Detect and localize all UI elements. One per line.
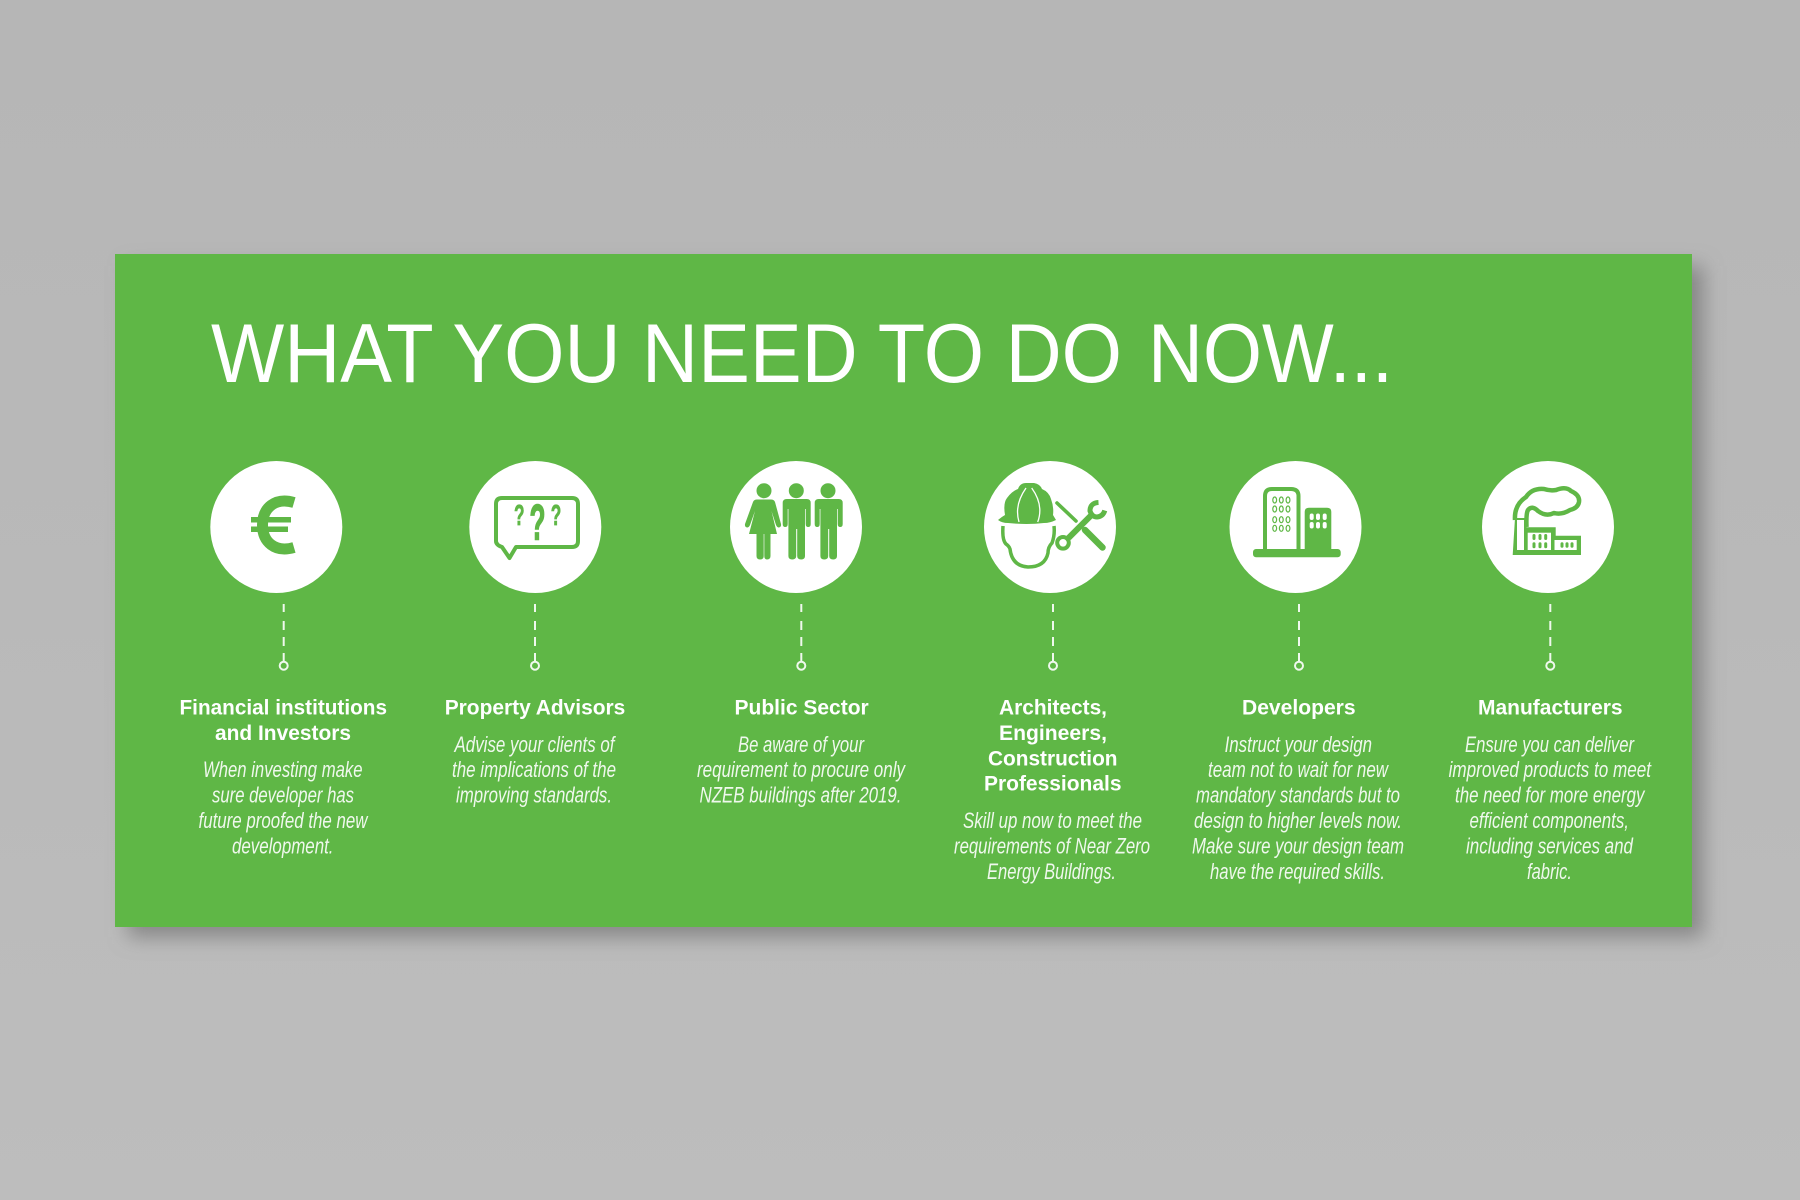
column: developers <box>1192 461 1404 884</box>
description: improved products to meet <box>1449 757 1652 782</box>
description: including services and <box>1466 834 1634 858</box>
connector <box>531 604 539 670</box>
description: future proofed the new <box>198 808 369 833</box>
description: Skill up now to meet the <box>963 808 1142 833</box>
icon: euro <box>210 461 342 593</box>
description: sure developer has <box>212 782 354 808</box>
description <box>954 808 1150 884</box>
description: Instruct your design <box>1225 732 1372 757</box>
description: requirements of Near Zero <box>954 834 1150 858</box>
heading <box>984 696 1122 796</box>
heading: Developers <box>1242 696 1356 720</box>
description: design to higher levels now. <box>1194 808 1402 833</box>
icon: speech bubble with question marks: ? <box>530 494 546 550</box>
description: improving standards. <box>456 782 612 808</box>
heading: Financial institutions <box>180 696 387 720</box>
description: requirement to procure only <box>697 757 907 782</box>
icon: factory <box>1482 461 1614 593</box>
heading: Construction <box>988 748 1118 770</box>
icon: hard hat and tools <box>984 461 1116 593</box>
title: WHAT YOU NEED TO DO <box>211 306 1122 400</box>
column: public sector <box>697 461 907 808</box>
description: team not to wait for new <box>1208 757 1390 782</box>
description: fabric. <box>1527 859 1572 884</box>
icon: speech bubble with question marks <box>469 461 601 593</box>
icon: speech bubble with question marks: ? <box>551 500 561 532</box>
description <box>697 732 907 808</box>
heading: Professionals <box>984 772 1122 796</box>
connector <box>1049 604 1057 670</box>
description <box>452 732 617 808</box>
connector <box>797 604 805 670</box>
panel shadow <box>128 266 1703 937</box>
column: manufacturers <box>1449 461 1652 884</box>
connector <box>280 604 288 670</box>
description: Make sure your design team <box>1192 834 1404 858</box>
icon: three people <box>730 461 862 593</box>
description: NZEB buildings after 2019. <box>700 782 902 808</box>
description: When investing make <box>203 757 362 782</box>
connector <box>1295 604 1303 670</box>
description <box>1449 732 1652 884</box>
description: mandatory standards but to <box>1196 782 1400 808</box>
heading: and Investors <box>215 722 351 745</box>
description: Energy Buildings. <box>987 859 1116 884</box>
icon: buildings <box>1230 461 1362 593</box>
column: architects and engineers <box>954 461 1150 884</box>
connector <box>1546 604 1554 670</box>
description: Ensure you can deliver <box>1465 732 1635 757</box>
column: property advisors <box>445 461 625 808</box>
panel: green banner <box>115 254 1692 927</box>
description: Be aware of your <box>738 732 865 757</box>
heading: Architects, <box>999 696 1107 720</box>
description: the need for more energy <box>1455 782 1646 808</box>
heading: Manufacturers <box>1478 696 1623 720</box>
description: have the required skills. <box>1210 859 1385 884</box>
heading: Engineers, <box>999 722 1107 745</box>
heading: Public Sector <box>734 696 869 720</box>
description <box>1192 732 1404 884</box>
title: NOW... <box>1148 306 1393 400</box>
heading <box>180 696 387 745</box>
description: the implications of the <box>452 757 616 782</box>
description: development. <box>232 834 334 858</box>
column: financial institutions <box>180 461 387 858</box>
heading: Property Advisors <box>445 696 625 720</box>
description: efficient components, <box>1470 808 1629 833</box>
icon: speech bubble with question marks: ? <box>514 500 524 532</box>
description: Advise your clients of <box>453 732 617 757</box>
description <box>198 757 369 858</box>
